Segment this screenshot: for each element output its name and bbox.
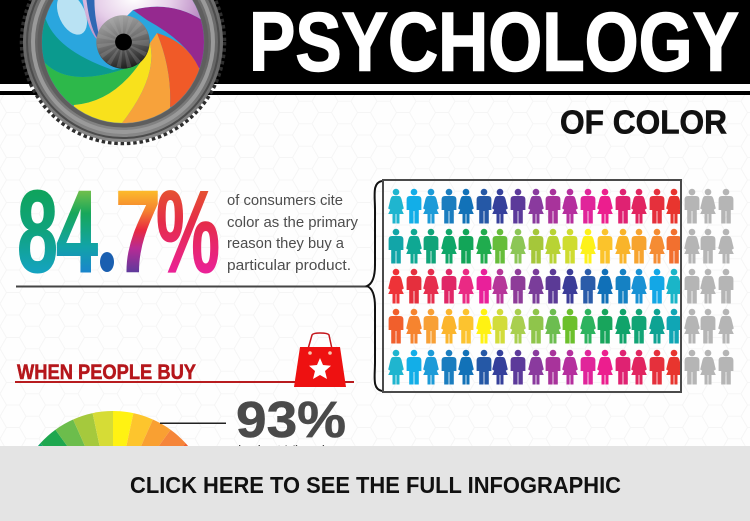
statistic: 84.7%: 7 xyxy=(115,166,161,297)
text block: consumers cite color: particular product. xyxy=(227,257,351,274)
banner: call to action xyxy=(0,446,750,521)
text block: consumers cite color xyxy=(227,192,358,274)
banner: call to action: CLICK HERE TO SEE THE FULL INFOGRAPHIC xyxy=(130,472,621,498)
chart: colour wheel semicircle xyxy=(28,411,198,509)
leader line to 93% xyxy=(160,422,226,424)
statistic: 84.7%: . xyxy=(99,212,115,279)
divider line to brace xyxy=(16,286,368,288)
icon: camera lens with rainbow aperture xyxy=(22,0,224,143)
brace xyxy=(367,181,382,391)
heading: when people buy: WHEN PEOPLE BUY xyxy=(17,361,196,384)
caption under 93%: look at Visual xyxy=(238,442,325,458)
statistic: 84.7%: 8 xyxy=(17,166,58,297)
text block: consumers cite color: color as the primary xyxy=(227,214,358,231)
row 1 figures xyxy=(388,189,733,224)
statistic: 84.7%: % xyxy=(156,166,220,297)
statistic: 84.7% xyxy=(17,166,220,297)
row 4 figures xyxy=(389,309,734,344)
text block: consumers cite color: reason they buy a xyxy=(227,235,345,252)
header band xyxy=(0,0,750,95)
statistic: 93%: 93% xyxy=(236,391,346,448)
row 3 figures xyxy=(388,269,733,304)
icon: shopping bag with star xyxy=(294,333,346,387)
frame around coloured figures xyxy=(383,180,681,392)
heading underline xyxy=(15,381,354,383)
subtitle: of color: OF COLOR xyxy=(560,104,727,140)
row 5 figures xyxy=(388,350,733,384)
row 2 figures xyxy=(389,229,734,264)
text block: consumers cite color: of consumers cite xyxy=(227,192,343,209)
statistic: 84.7%: 4 xyxy=(56,166,98,297)
pictogram: people grid xyxy=(388,189,734,384)
